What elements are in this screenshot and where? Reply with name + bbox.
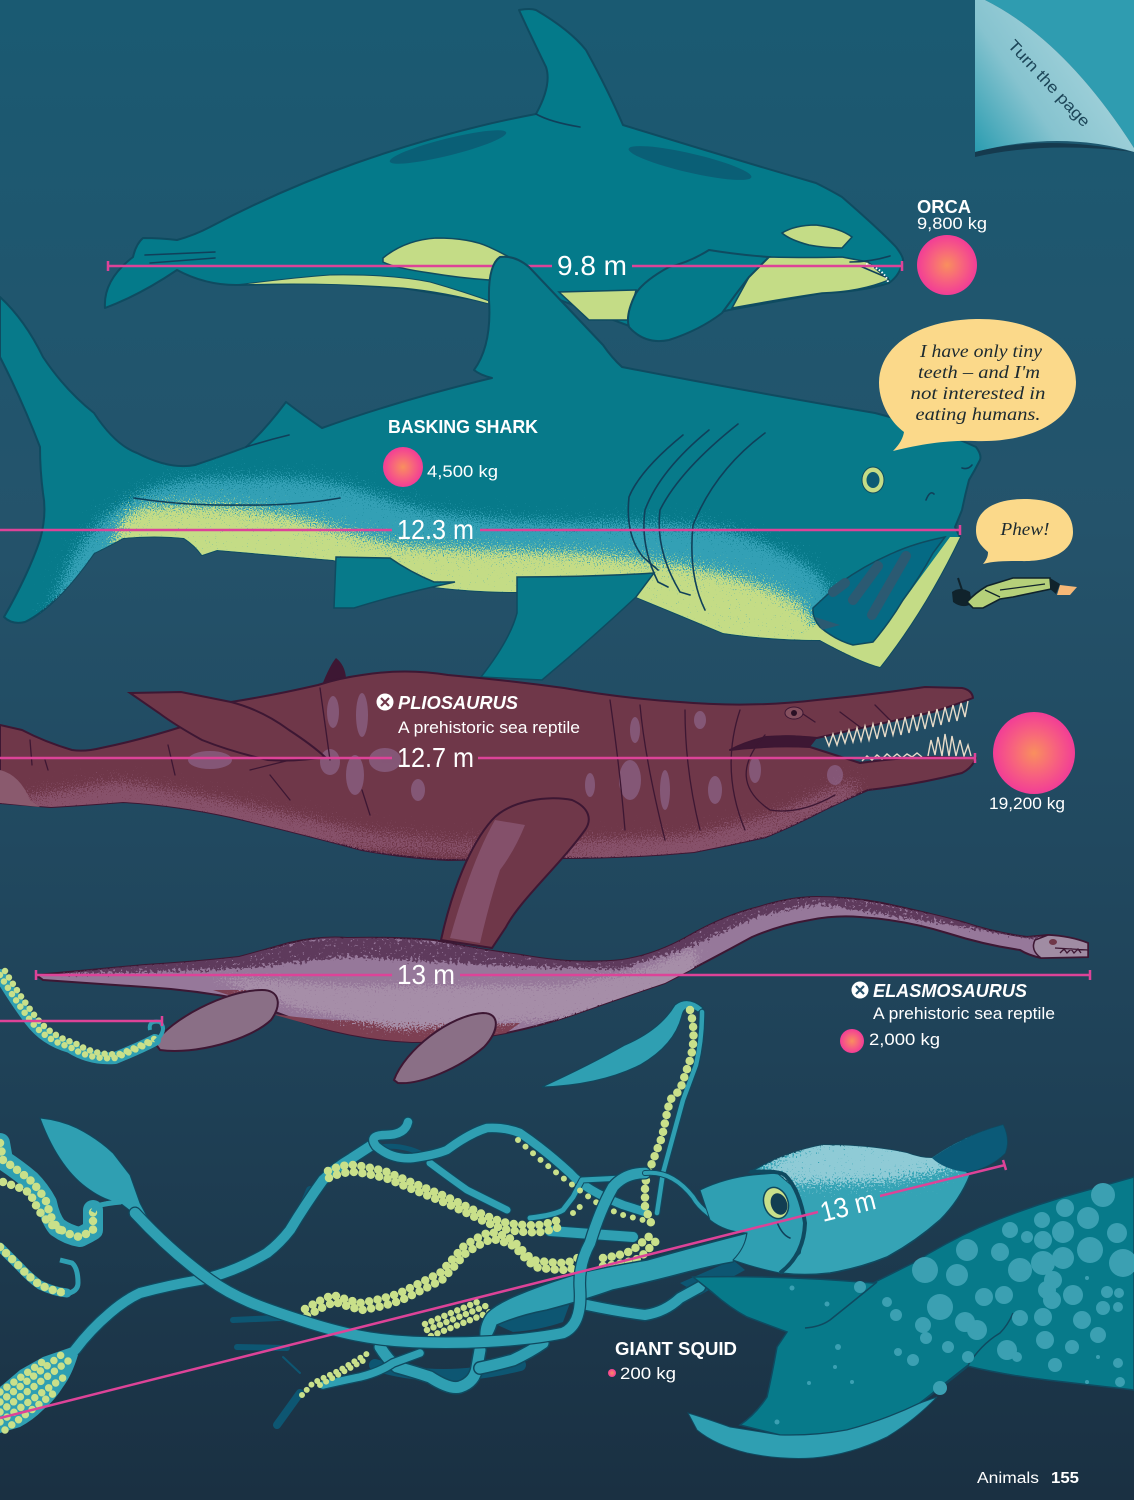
teeth [825, 701, 971, 761]
squid label: GIANT SQUID [615, 1339, 737, 1359]
elasmosaurus label: 2,000 kg [869, 1030, 940, 1049]
shark label: BASKING SHARK [388, 417, 538, 437]
fluke creases [805, 1282, 1013, 1403]
body creases [30, 688, 890, 840]
orca length line: 9.8 m [557, 250, 627, 281]
corner page turn [975, 0, 1134, 157]
speech bubble: tiny teeth: not interested in [910, 383, 1046, 403]
dark web between arms [493, 1260, 745, 1332]
shark label [383, 417, 538, 487]
elasmosaurus length line: 13 m [397, 959, 455, 990]
mouth lining [730, 735, 817, 750]
orca label: 9,800 kg [917, 214, 987, 233]
pectoral fin [481, 573, 654, 680]
mantle [750, 1125, 1007, 1274]
whale spots [774, 1183, 1134, 1424]
shark mouth [813, 537, 945, 645]
pelvic fin [334, 557, 455, 608]
orca label: ORCA [917, 197, 971, 217]
pliosaurus mass [989, 712, 1075, 813]
lime tentacle club [0, 1347, 78, 1433]
scuba diver [952, 578, 1077, 608]
speech bubble: phew [976, 499, 1073, 564]
feeding tentacle with leaf club [40, 1118, 737, 1343]
pale mottled patches [188, 693, 843, 810]
shark length line: 12.3 m [397, 514, 474, 545]
pliosaurus length line: 12.7 m [397, 742, 474, 773]
squid label [608, 1339, 737, 1383]
page footer: Animals [977, 1470, 1039, 1487]
squid length line: 13 m [817, 1184, 879, 1228]
left tentacle tips [0, 1143, 121, 1294]
dorsal fin [322, 658, 346, 685]
shark label: 4,500 kg [427, 462, 498, 481]
lower fluke [688, 1397, 937, 1458]
speech bubble: tiny teeth [879, 319, 1076, 451]
dark back arms [233, 1146, 520, 1425]
pliosaurus label [376, 693, 580, 737]
elasmosaurus label: A prehistoric sea reptile [873, 1004, 1055, 1023]
page footer: 155 [1051, 1470, 1079, 1487]
squid label: 200 kg [620, 1364, 676, 1383]
whale tail and spotted body [688, 1177, 1134, 1458]
pliosaurus length line [0, 742, 975, 773]
speech bubble: tiny teeth: eating humans. [916, 404, 1040, 424]
pliosaurus [0, 658, 976, 870]
speech bubble: phew: Phew! [999, 519, 1050, 539]
shark length line [0, 514, 960, 545]
sucker rows [302, 1010, 694, 1395]
head [700, 1171, 805, 1273]
upper arm with crescent tip [542, 1001, 703, 1213]
elasmosaurus label [840, 981, 1055, 1053]
squid length line [0, 1160, 1006, 1418]
shark eye [862, 465, 972, 500]
pliosaurus front flipper [441, 798, 589, 948]
orca length line [108, 250, 902, 281]
orca [105, 9, 903, 341]
elasmosaurus [36, 892, 1088, 1083]
short arm length line [0, 971, 163, 1058]
rear paddle [155, 990, 278, 1051]
elasmosaurus label: ELASMOSAURUS [873, 981, 1027, 1001]
front paddle [394, 1013, 496, 1083]
basking shark [0, 257, 980, 690]
lower body stipple [0, 775, 860, 870]
speech bubble: tiny teeth: I have only tiny [919, 341, 1042, 361]
orca label [917, 197, 987, 295]
pliosaurus label: PLIOSAURUS [398, 693, 518, 713]
speech bubble: tiny teeth: teeth – and I'm [918, 362, 1040, 382]
rear flipper [130, 692, 325, 761]
arms [75, 1122, 700, 1388]
giant squid [0, 971, 1134, 1487]
main arm from head [480, 1233, 747, 1340]
pliosaurus label: A prehistoric sea reptile [398, 718, 580, 737]
elasmosaurus length line [36, 959, 1090, 990]
page footer [977, 1470, 1079, 1487]
pliosaurus mass: 19,200 kg [989, 794, 1065, 813]
corner page turn: Turn the page [1004, 37, 1093, 131]
elasmosaurus head [1033, 935, 1088, 958]
eye [785, 707, 803, 719]
